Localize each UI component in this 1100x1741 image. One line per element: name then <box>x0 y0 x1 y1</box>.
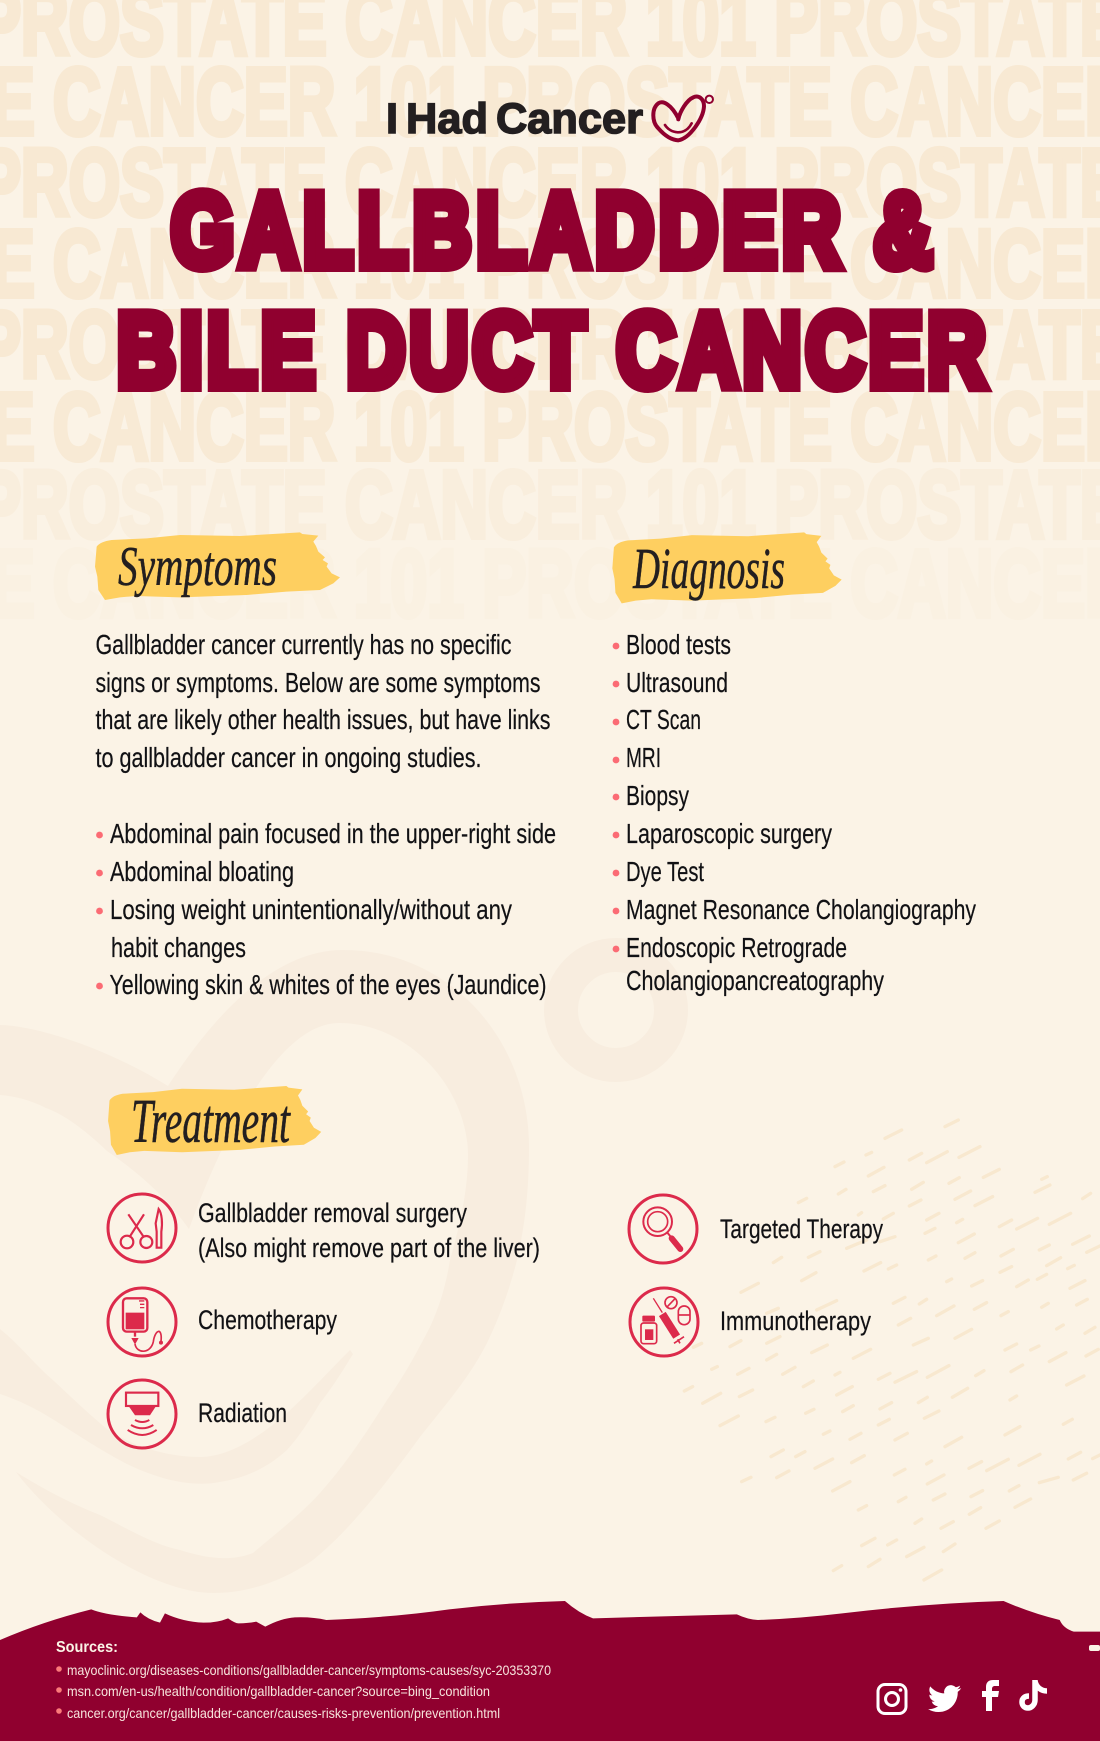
icon: tiktok <box>1022 1680 1047 1708</box>
treatment text: gallbladder removal surgery <box>198 1198 540 1263</box>
symptoms bullet list <box>96 818 556 1000</box>
diagnosis bullet list: Biopsy <box>626 780 689 811</box>
icon: targeted therapy magnifier <box>629 1195 697 1263</box>
diagnosis bullet list: CT Scan <box>626 704 701 735</box>
treatment text: radiation: Radiation <box>198 1398 287 1428</box>
icon: twitter <box>928 1685 961 1712</box>
background heart watermark <box>0 950 671 1593</box>
background text pattern <box>0 0 1100 637</box>
icon: immunotherapy medicine <box>630 1288 698 1356</box>
sources <box>56 1639 551 1721</box>
icon: radiation machine <box>108 1380 176 1448</box>
diagnosis bullet list: MRI <box>626 742 661 773</box>
symptoms intro text: Gallbladder cancer currently has no specific <box>96 629 512 660</box>
diagnosis bullet list: Laparoscopic surgery <box>626 818 832 849</box>
symptoms intro text: that are likely other health issues, but have links <box>96 704 550 735</box>
title <box>117 172 986 408</box>
sources: msn.com/en-us/health/condition/gallbladder-cancer?source=bing_condition <box>67 1683 490 1699</box>
icon: chemotherapy drip bag <box>108 1288 176 1356</box>
symptoms bullet list: habit changes <box>111 932 246 963</box>
symptoms bullet list: Abdominal bloating <box>110 856 294 887</box>
heading: symptoms: Symptoms <box>118 536 277 598</box>
sources: mayoclinic.org/diseases-conditions/gallbladder-cancer/symptoms-causes/syc-20353370 <box>67 1662 551 1678</box>
symptoms intro text: to gallbladder cancer in ongoing studies. <box>96 742 482 773</box>
diagnosis bullet list <box>613 629 976 996</box>
diagnosis bullet list: Endoscopic Retrograde <box>626 932 847 963</box>
title: BILE DUCT CANCER <box>117 292 986 408</box>
treatment text: gallbladder removal surgery: Gallbladder removal surgery <box>198 1198 467 1228</box>
diagnosis bullet list: Dye Test <box>626 856 704 887</box>
heading: diagnosis: Diagnosis <box>632 536 785 601</box>
symptoms bullet list: Losing weight unintentionally/without any <box>110 894 512 925</box>
panel: treatment <box>108 1086 883 1448</box>
symptoms bullet list: Yellowing skin & whites of the eyes (Jaundice) <box>110 969 546 1000</box>
treatment text: gallbladder removal surgery: (Also might remove part of the liver) <box>198 1233 540 1263</box>
icon: instagram <box>878 1684 906 1714</box>
footer band <box>0 1601 1100 1741</box>
treatment text: chemotherapy: Chemotherapy <box>198 1305 337 1335</box>
treatment text: targeted therapy: Targeted Therapy <box>720 1214 883 1244</box>
title: GALLBLADDER & <box>171 172 932 288</box>
diagnosis bullet list: Magnet Resonance Cholangiography <box>626 894 976 925</box>
background dash pattern <box>684 1120 1100 1580</box>
icon: facebook <box>982 1680 999 1711</box>
treatment text: immunotherapy: Immunotherapy <box>720 1306 871 1336</box>
heading: treatment: Treatment <box>131 1088 291 1156</box>
icon: surgery scissors and scalpel <box>108 1194 176 1262</box>
logo: I Had Cancer: I Had Cancer <box>386 95 643 143</box>
diagnosis bullet list: Cholangiopancreatography <box>626 965 884 996</box>
panel: diagnosis <box>612 532 976 996</box>
sources: Sources: <box>56 1639 118 1656</box>
sources: cancer.org/cancer/gallbladder-cancer/causes-risks-prevention/prevention.html <box>67 1705 500 1721</box>
heading: treatment <box>108 1086 321 1156</box>
symptoms bullet list: Abdominal pain focused in the upper-right side <box>110 818 556 849</box>
panel: symptoms <box>95 532 556 1000</box>
symptoms intro text: signs or symptoms. Below are some symptoms <box>96 667 540 698</box>
symptoms intro text <box>96 629 550 773</box>
diagnosis bullet list: Blood tests <box>626 629 731 660</box>
diagnosis bullet list: Ultrasound <box>626 667 728 698</box>
